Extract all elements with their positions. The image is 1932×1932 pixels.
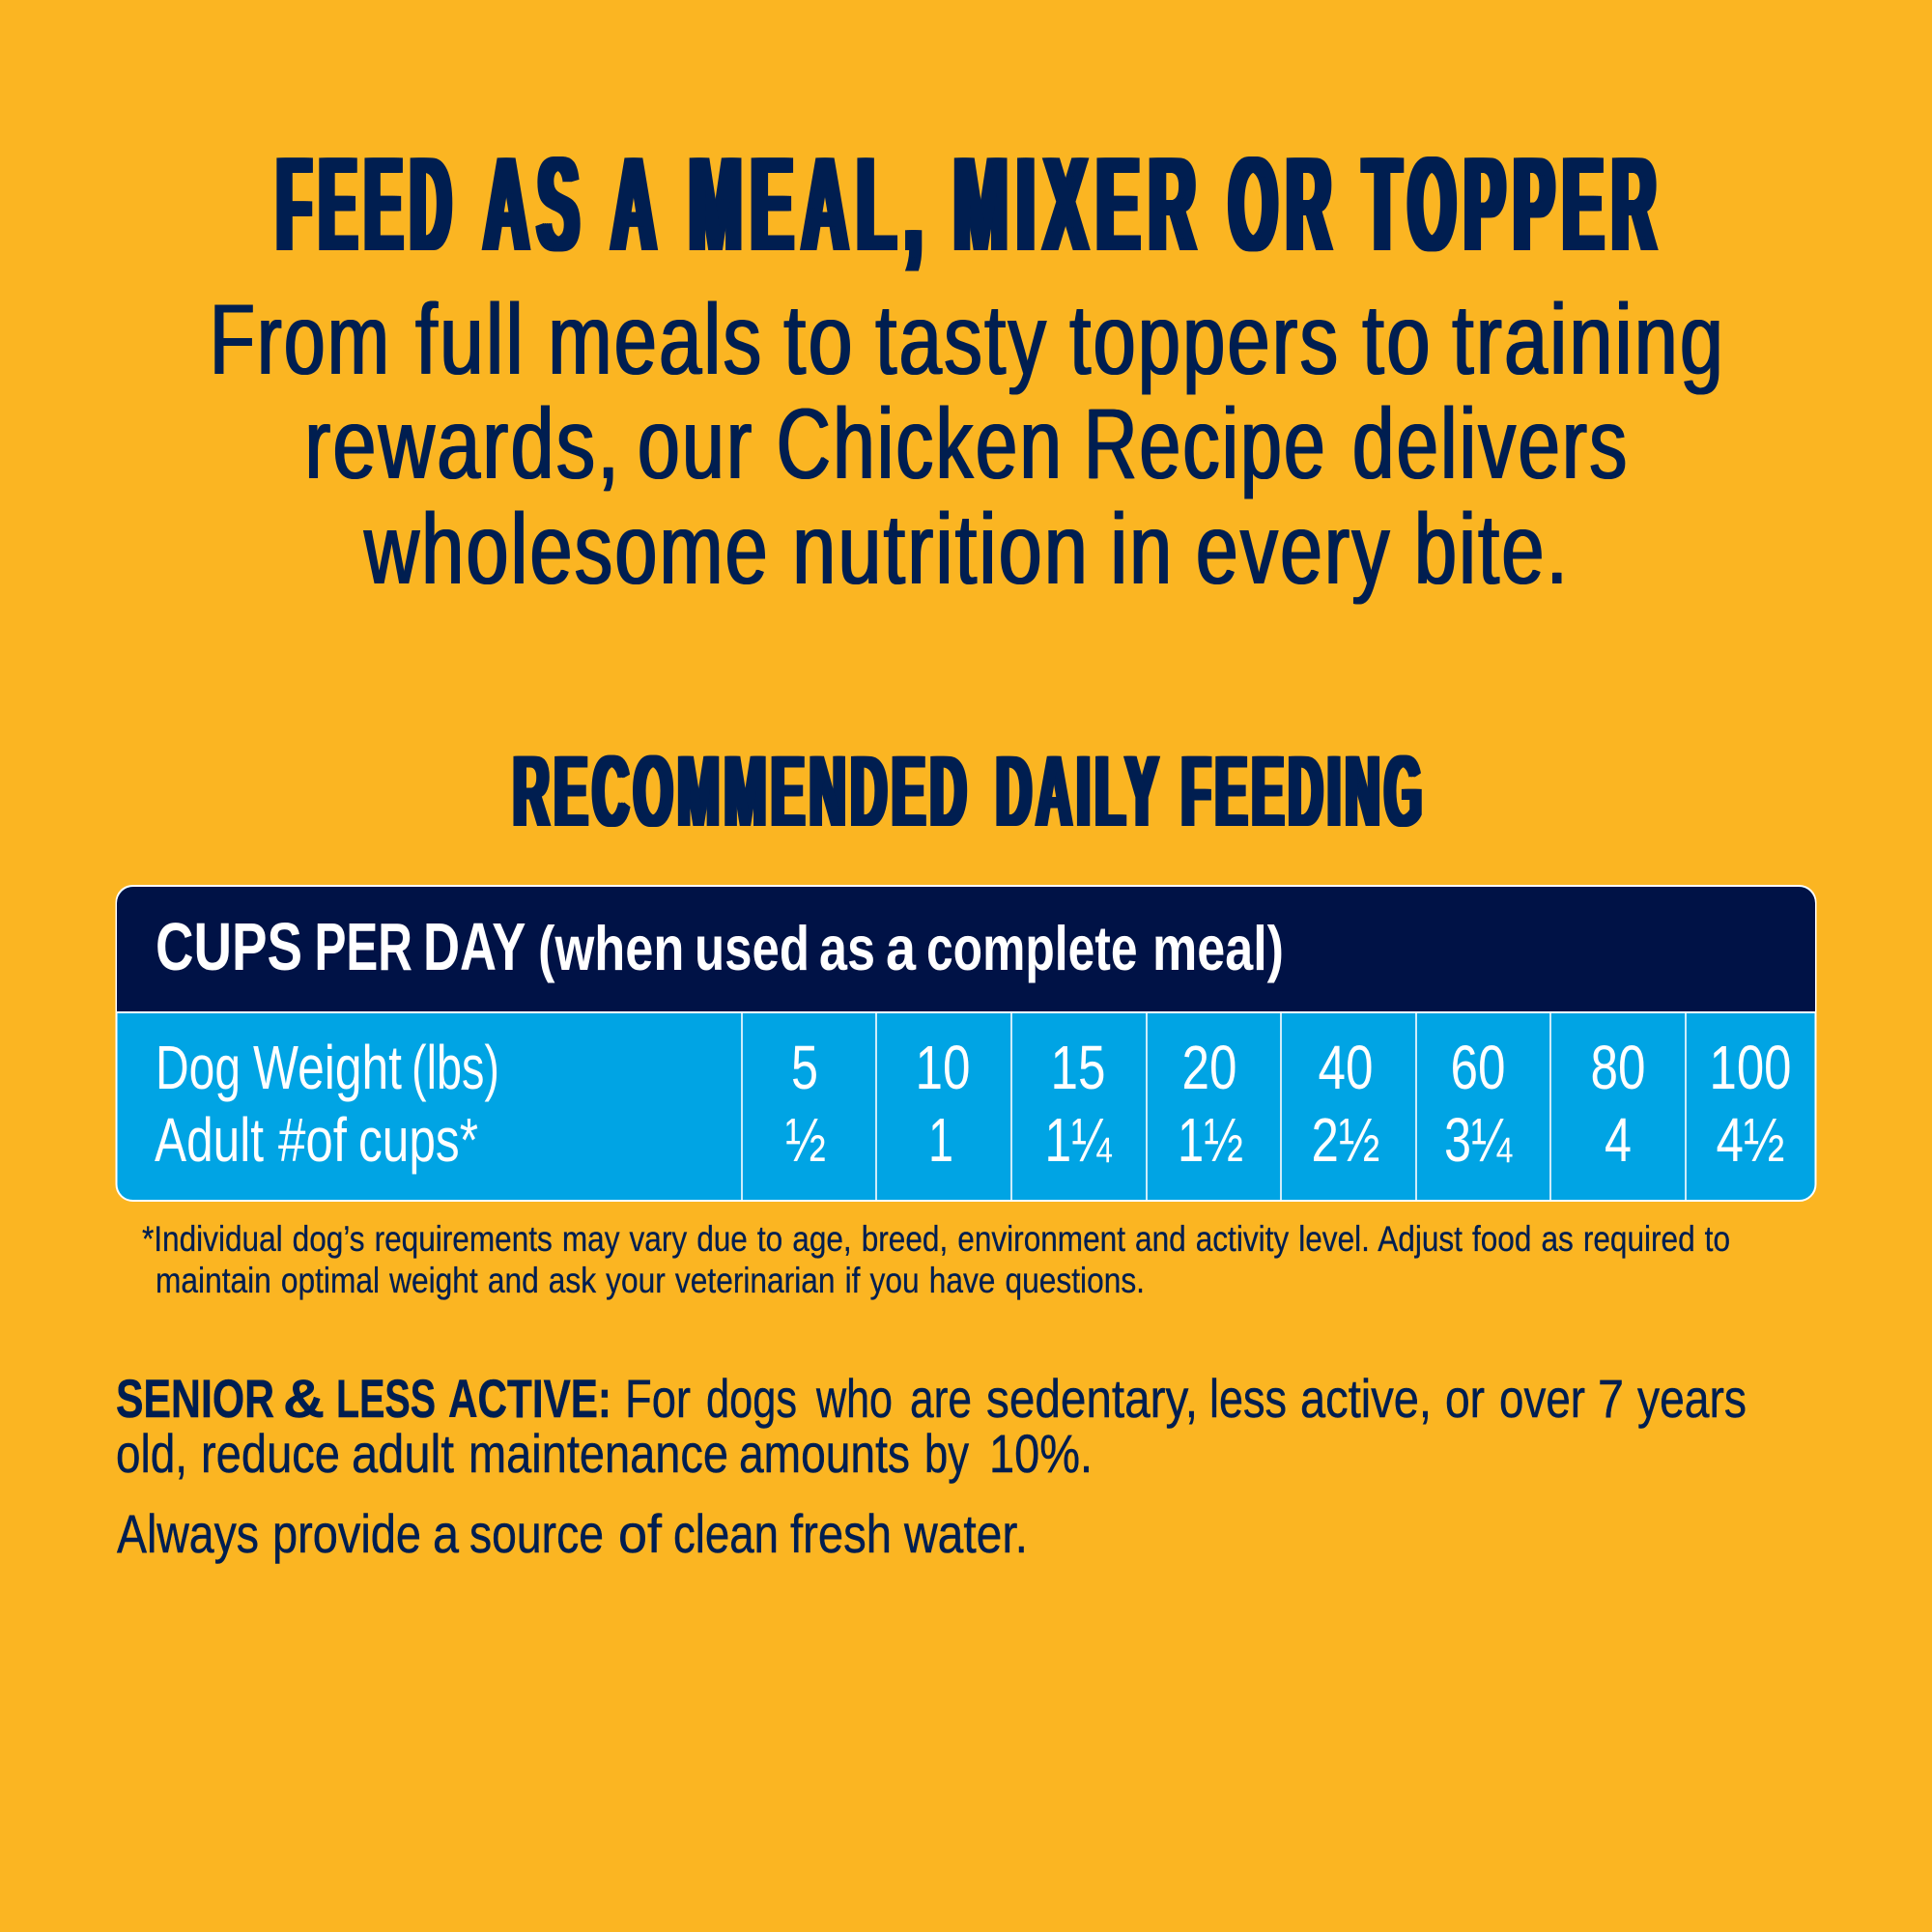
intro text: wholesome (363, 494, 770, 606)
title: OR (1229, 129, 1340, 279)
title: FEED (276, 129, 459, 279)
cup values: 3¼ (1444, 1105, 1513, 1175)
intro text: to (1362, 284, 1433, 396)
table header text (156, 909, 1284, 984)
bold lead-in: ACTIVE: (448, 1368, 611, 1429)
weight values: 100 (1710, 1033, 1791, 1102)
table body panel (116, 886, 1816, 1201)
senior and less active note: are (910, 1368, 972, 1429)
senior and less active note: or (1445, 1368, 1485, 1429)
cup values: 1½ (1178, 1105, 1243, 1175)
senior and less active note: over (1499, 1368, 1585, 1429)
intro text: training (1452, 284, 1725, 396)
table header band (117, 887, 1815, 1012)
weight values: 80 (1590, 1033, 1646, 1102)
title (276, 129, 1664, 279)
water note: of (618, 1503, 662, 1564)
water note: fresh (790, 1503, 892, 1564)
senior and less active note: 7 (1598, 1368, 1624, 1429)
table footnote: maintain optimal weight and ask your veterinarian if you have questions. (156, 1261, 1145, 1300)
senior and less active note: less (1209, 1368, 1287, 1429)
row labels: #of (278, 1105, 347, 1175)
cup values: 1 (928, 1105, 953, 1175)
senior and less active note: who (815, 1368, 893, 1429)
section heading: RECOMMENDED (513, 735, 971, 848)
section heading: DAILY (996, 735, 1163, 848)
title: AS (484, 129, 587, 279)
cup values: 1¼ (1045, 1105, 1113, 1175)
weight values: 10 (916, 1033, 970, 1102)
intro text: tasty (875, 284, 1048, 396)
bold lead-in: & (283, 1368, 325, 1429)
table header text: as (819, 913, 875, 983)
infographic canvas: FEEDING (1181, 735, 1426, 848)
bold lead-in (116, 1368, 611, 1429)
intro text: Chicken (777, 388, 1064, 500)
weight values: 15 (1051, 1033, 1105, 1102)
table header text: (when (538, 913, 684, 983)
row labels: cups* (358, 1105, 478, 1175)
water note (117, 1503, 1028, 1564)
table header text: PER (315, 909, 412, 984)
row labels: (lbs) (412, 1033, 499, 1102)
intro text: Recipe (1084, 388, 1327, 500)
intro text: in (1111, 494, 1174, 606)
table header text: a (886, 913, 917, 983)
row labels: Weight (253, 1033, 402, 1102)
title: A (611, 129, 665, 279)
weight values: 60 (1451, 1033, 1505, 1102)
senior and less active note: years (1637, 1368, 1747, 1429)
intro text: From (210, 284, 391, 396)
intro text: full (415, 284, 526, 396)
intro text: rewards, (304, 388, 621, 500)
intro text: delivers (1352, 388, 1629, 500)
senior and less active note (116, 1368, 1747, 1484)
bold lead-in: SENIOR (116, 1368, 274, 1429)
intro text (210, 284, 1725, 606)
senior and less active note: amounts (739, 1423, 910, 1484)
intro text: nutrition (792, 494, 1090, 606)
senior and less active note: old, (116, 1423, 187, 1484)
senior and less active note: sedentary, (986, 1368, 1198, 1429)
water note: water. (903, 1503, 1028, 1564)
water note: source (469, 1503, 604, 1564)
senior and less active note: maintenance (469, 1423, 728, 1484)
senior and less active note: reduce (201, 1423, 340, 1484)
intro text: to (783, 284, 855, 396)
table header text: CUPS (156, 909, 302, 984)
table footnote (142, 1219, 1730, 1300)
water note: provide (272, 1503, 421, 1564)
senior and less active note: For (625, 1368, 691, 1429)
feeding table (116, 886, 1816, 1201)
weight values: 20 (1182, 1033, 1236, 1102)
weight values: 40 (1318, 1033, 1374, 1102)
water note: Always (117, 1503, 259, 1564)
row labels: Dog (156, 1033, 241, 1102)
senior and less active note: by (924, 1423, 969, 1484)
intro text: meals (548, 284, 763, 396)
title: MEAL, (689, 129, 931, 279)
row labels: Adult (155, 1105, 264, 1175)
intro text: bite. (1414, 494, 1570, 606)
water note: clean (673, 1503, 779, 1564)
cup values: ½ (785, 1105, 826, 1175)
row labels (155, 1033, 499, 1175)
table header text: complete (926, 913, 1138, 983)
senior and less active note: active, (1300, 1368, 1432, 1429)
cup values: 4 (1605, 1105, 1632, 1175)
weight values (791, 1033, 1791, 1102)
title: MIXER (953, 129, 1205, 279)
intro text: toppers (1069, 284, 1340, 396)
senior and less active note: dogs (706, 1368, 797, 1429)
table header text: used (695, 913, 810, 983)
intro text: our (638, 388, 753, 500)
cup values (785, 1105, 1785, 1175)
table header text: DAY (423, 909, 526, 984)
senior and less active note: 10%. (989, 1423, 1093, 1484)
senior and less active note: adult (352, 1423, 454, 1484)
water note: a (433, 1503, 460, 1564)
intro text: every (1196, 494, 1392, 606)
cup values: 4½ (1716, 1105, 1785, 1175)
weight values: 5 (791, 1033, 818, 1102)
table header text: meal) (1152, 913, 1284, 983)
cup values: 2½ (1312, 1105, 1379, 1175)
bold lead-in: LESS (336, 1368, 436, 1429)
